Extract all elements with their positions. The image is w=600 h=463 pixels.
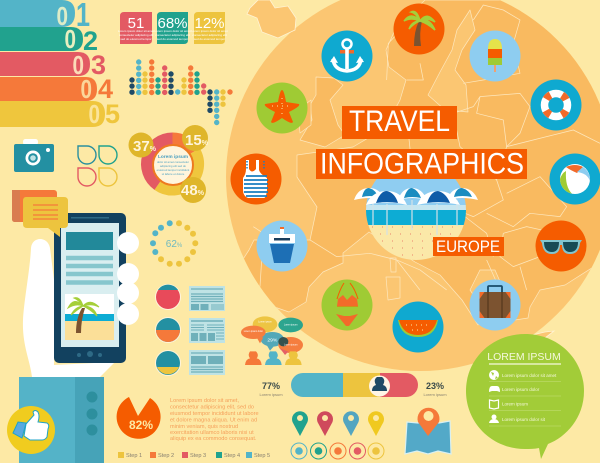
icon: suitcase [470, 280, 520, 330]
speech bubbles with people [241, 316, 303, 365]
user badge [369, 376, 390, 396]
bar 4: 4 [98, 74, 113, 104]
map pins [292, 411, 384, 436]
card 12%: Lorem ipsum dolor sit amet [191, 29, 228, 33]
bar 3: 3 [91, 50, 106, 80]
title: TRAVEL: TRAVEL [349, 105, 450, 138]
card 51 [118, 12, 154, 44]
chat bubbles [12, 190, 68, 237]
dot chart [132, 62, 230, 123]
hand holding phone [23, 213, 139, 377]
right label: Lorem ipsum [423, 392, 447, 397]
card 68% [154, 12, 191, 44]
row: globe: Lorem ipsum dolor sit amet [502, 373, 557, 378]
orange paragraph: eiusmod tempor incididunt ut labore [170, 411, 259, 417]
layout row 1 [155, 284, 225, 311]
bar 1 [0, 0, 90, 33]
icon: bikini [322, 280, 372, 330]
stat cards [118, 12, 228, 44]
left label: 77% [262, 381, 280, 391]
colour circle 3 [155, 350, 181, 376]
label 15%: 15% [185, 132, 209, 149]
pie chart 82% [117, 397, 161, 439]
layout row 2 [155, 317, 225, 343]
bar 4: 0 [80, 74, 92, 104]
scene: beach under umbrellas [354, 179, 478, 260]
orange paragraph: exercitation ullamco laboris nisi ut [170, 430, 254, 436]
icon: anchor [322, 30, 372, 82]
left label: Lorem ipsum [259, 392, 283, 397]
colour circle 1 [155, 284, 181, 310]
bar 1: 0 [56, 1, 68, 31]
right label [423, 381, 447, 397]
left label [259, 381, 283, 397]
right label: 23% [426, 381, 444, 391]
phone [54, 213, 126, 363]
icon: starfish [256, 82, 308, 134]
card 12%: consectetur adipiscing elit [192, 33, 227, 37]
icon: folded map with pin [405, 408, 451, 454]
row: people: Lorem ipsum dolor sit [502, 417, 546, 422]
panel: green bubble [466, 334, 584, 459]
beach circle [366, 179, 466, 260]
layout thumbnail 3 [189, 350, 225, 375]
icon: palm [394, 4, 444, 54]
orange paragraph: consectetur adipiscing elit, sed do [170, 404, 254, 410]
legend steps: Step 1 [126, 453, 142, 459]
donut chart [128, 125, 209, 203]
country borders [253, 5, 600, 290]
bar 4 [0, 74, 113, 104]
Iceland [247, 0, 296, 38]
orange paragraph [170, 398, 259, 442]
layout row 3 [155, 350, 225, 376]
Cyprus outline [528, 331, 554, 338]
hand [23, 239, 115, 377]
icon: popsicle [470, 30, 520, 82]
colour circle 2 [155, 317, 181, 343]
label 37%: 37% [133, 138, 157, 155]
umbrellas [354, 188, 478, 205]
card 68%: Lorem ipsum dolor sit amet [154, 29, 191, 33]
orange paragraph: minim veniam, quis nostrud [170, 424, 238, 430]
ring markers [291, 443, 384, 459]
icon: swimsuit [230, 154, 282, 204]
bar 5 [0, 99, 120, 129]
speech bubbles with people: Lorem ipsum [284, 343, 297, 346]
row: gamepad: Lorem ipsum dolor [502, 387, 540, 392]
icon: watermelon [392, 302, 444, 352]
card 68%: 68% [157, 15, 188, 32]
bar 5: 0 [88, 99, 100, 129]
card 12%: 12% [194, 15, 225, 32]
legend steps: Step 3 [190, 453, 206, 459]
sleeve [19, 377, 104, 463]
donut center text [157, 154, 190, 176]
legend steps: Step 5 [254, 453, 270, 459]
bar 3: 0 [72, 50, 84, 80]
donut center text: eiusmod tempor incididunt [157, 168, 190, 172]
bar 3 [0, 50, 106, 80]
donut center text: adipiscing elit sed do [160, 164, 186, 168]
orange paragraph: et dolore magna aliqua. Ut enim ad [170, 418, 257, 424]
bar 5: 5 [105, 99, 120, 129]
umbrella poles [373, 200, 457, 235]
title: INFOGRAPHICS: INFOGRAPHICS [320, 148, 524, 180]
pie chart 82%: 82% [129, 418, 153, 432]
card 68%: consectetur adipiscing elit [155, 33, 190, 37]
progress bar 77 / 23 [259, 373, 447, 397]
land masses [236, 0, 600, 325]
card 51: 51 [128, 15, 144, 32]
orange paragraph: aliquip ex ea commodo consequat. [170, 436, 257, 442]
donut center text: ut labore et dolore [162, 172, 185, 176]
phone photo: palm on beach [65, 294, 114, 340]
legend steps: Step 4 [224, 453, 240, 459]
orange paragraph: Lorem ipsum dolor sit amet, [170, 398, 239, 404]
fingers [117, 232, 139, 325]
donut center text: dolor sit amet consectetur [157, 160, 189, 164]
icon: camera [14, 139, 54, 172]
speech bubbles with people: Lorem ipsum [258, 321, 272, 324]
icon: beach ball [550, 154, 600, 204]
card 68%: sed do eiusmod tempor [157, 37, 188, 41]
row: book: Lorem ipsum [502, 402, 528, 406]
speech bubbles with people: Lorem ipsum dolor [244, 330, 263, 333]
icon: four outline drops [78, 146, 117, 186]
card 12%: sed do eiusmod tempor [194, 37, 225, 41]
map of Europe [226, 0, 600, 371]
62% ring chart [150, 220, 198, 267]
speech bubbles with people: Lorem ipsum [284, 323, 297, 326]
card 51: Lorem ipsum dolor sit amet [118, 29, 154, 33]
bar 2: 2 [83, 26, 98, 56]
icon: lifebuoy [530, 80, 582, 130]
card 51: consectetur adipiscing elit [119, 33, 153, 37]
layout thumbnail 1 [189, 286, 225, 311]
icon: thumbs up [7, 406, 55, 454]
icon: sunglasses [536, 220, 586, 272]
subtitle: EUROPE: EUROPE [436, 237, 500, 256]
donut center text: Lorem ipsum [158, 154, 188, 160]
card 51: sed do eiusmod tempor [120, 37, 152, 41]
numbered bars [0, 0, 120, 129]
bar 2 [0, 24, 98, 56]
legend steps [118, 452, 270, 459]
bar 2: 0 [64, 24, 76, 54]
label 48%: 48% [181, 182, 205, 199]
layout thumbnail 2 [189, 318, 225, 343]
card 12% [191, 12, 228, 44]
icon: ship [256, 220, 308, 272]
map circle [226, 0, 600, 371]
speech bubbles with people: 29% [267, 337, 278, 343]
legend steps: Step 2 [158, 453, 174, 459]
62% ring chart: 62% [166, 239, 183, 250]
panel heading: LOREM IPSUM [487, 351, 561, 363]
